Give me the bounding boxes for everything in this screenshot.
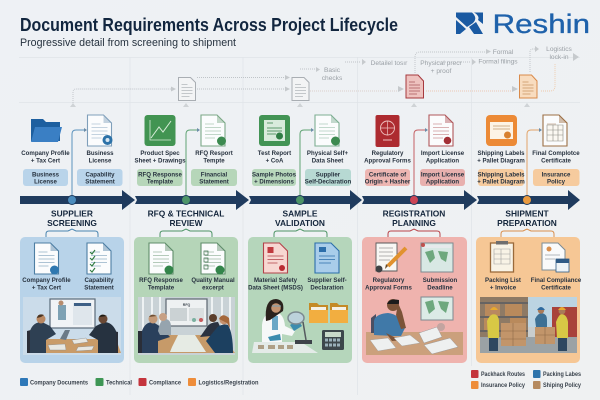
label: regulatory approval forms: Regulatory	[373, 277, 405, 284]
flow document 3	[292, 78, 309, 100]
flow label: physical proof: + proof	[431, 68, 452, 75]
icon: folder	[31, 119, 62, 142]
chip: insurance policy: Policy	[547, 178, 566, 186]
label: MSDS: Data Sheet (MSDS)	[248, 284, 303, 292]
scene: warehouse	[480, 297, 577, 353]
label: regulatory approval: Regulatory	[372, 150, 404, 157]
chip: RFQ response: RFQ Response	[138, 172, 182, 178]
panel: supplier screening	[20, 237, 124, 363]
chip: business license: License	[34, 178, 57, 186]
icon: quality manual	[201, 243, 225, 274]
label: import license: Application	[426, 158, 459, 164]
panel: registration planning	[362, 237, 467, 363]
stage 5 top documents	[477, 115, 580, 186]
icon: shipping certificate	[486, 115, 517, 146]
label: quality manual: excerpt	[202, 284, 224, 292]
heading: sample validation: SAMPLE	[283, 208, 318, 218]
label: business license: License	[89, 158, 112, 164]
chip: business license	[23, 169, 68, 186]
chip: RFQ response	[137, 169, 182, 186]
label: product spec: Product Spec	[140, 150, 180, 157]
chip: import license: Application	[426, 178, 459, 186]
heading: RFQ and technical review: RFQ & TECHNICAL	[148, 208, 224, 218]
flow label: formal filings: Formal filings	[478, 58, 518, 66]
heading: registration planning: REGISTRATION	[383, 208, 445, 218]
chip: capability statement: Statement	[85, 178, 115, 186]
chip: shipping labels: + Pallet Diagram	[477, 178, 525, 186]
flow label: basic checks: Basic	[324, 67, 341, 74]
label: product spec: Sheet + Drawings	[135, 158, 186, 164]
legend: document types: Packing Labes	[543, 371, 581, 378]
chip: certificate of origin	[365, 169, 411, 186]
flow label: formal: Formal	[493, 49, 514, 56]
legend: categories: Logistics/Registration	[198, 380, 259, 386]
stage 2 top documents	[135, 115, 237, 186]
label: regulatory approval forms: Approval Forms	[365, 284, 412, 292]
label: test report: Test Report	[258, 150, 291, 157]
flow label: detail: Detailel tosır	[371, 60, 408, 67]
chip: capability statement: Capability	[85, 172, 115, 178]
chip: import license	[420, 169, 465, 186]
label: business license: Business	[86, 150, 114, 157]
connector 4	[414, 130, 425, 196]
flow label: physical proof: Physical precr	[420, 60, 463, 67]
icon: passport	[376, 115, 400, 147]
label: RFQ response: Template	[148, 284, 175, 292]
icon: report document	[201, 115, 226, 146]
icon: approval forms and pen	[376, 243, 406, 272]
icon: capability checklist	[87, 243, 111, 274]
node 5	[522, 196, 532, 204]
chip: shipping labels	[477, 169, 525, 186]
label: company profile tax cert: + Tax Cert	[32, 284, 61, 292]
connector 1	[72, 130, 84, 196]
chip: import license: Import License	[421, 172, 465, 178]
chip: insurance policy	[533, 169, 580, 186]
legend: categories	[20, 378, 259, 386]
stage 3 top documents	[252, 115, 351, 186]
connector 3	[300, 130, 311, 196]
node 3	[296, 196, 304, 204]
panel: shipment preparation	[476, 237, 582, 363]
timeline arrow	[20, 128, 580, 210]
chip: sample photos: + Dimensions	[254, 178, 295, 186]
node 1	[68, 196, 76, 204]
heading: supplier screening: SUPPLIER	[51, 208, 93, 218]
legend: document types: Shiping Policy	[543, 382, 581, 389]
upper document flow	[70, 46, 579, 107]
heading: shipment preparation: SHIPMENT	[505, 208, 550, 218]
label: final compliance certificate: Final Compliance	[531, 277, 582, 284]
chip: financial statement	[191, 169, 237, 186]
chip: supplier declaration	[305, 169, 351, 186]
logo: Reshin: Reshin	[492, 9, 590, 39]
label: final compliance certificate: Certificate	[541, 284, 572, 292]
chip: supplier declaration: Self-Declaration	[305, 178, 351, 186]
icon: supplier declaration document	[315, 243, 339, 273]
heading: RFQ and technical review: REVIEW	[169, 218, 203, 228]
chip: sample photos: Sample Photos	[252, 172, 297, 178]
label: MSDS: Material Safety	[254, 277, 298, 284]
chip: financial statement: Financial	[201, 172, 228, 178]
logo: Reshin	[456, 9, 590, 39]
heading: sample validation: VALIDATION	[275, 218, 325, 228]
legend: categories: Technical	[106, 380, 132, 386]
chip: capability statement	[77, 169, 122, 186]
label: final compliance: Certificate	[541, 158, 572, 164]
chip: shipping labels: Shipping Labels	[477, 172, 525, 178]
label: supplier self-declaration: Supplier Self-	[307, 277, 347, 284]
panel: sample validation	[248, 237, 352, 363]
label: final compliance: Final Complotce	[532, 150, 580, 157]
stage 1 top documents	[21, 115, 122, 186]
flow document 5: orange	[520, 75, 537, 98]
icon: submission deadline map	[421, 243, 453, 272]
icon: company profile document	[34, 243, 59, 274]
heading: registration planning: PLANNING	[392, 218, 436, 228]
label: supplier self-declaration: Declaration	[310, 284, 344, 292]
label: packing list: Packing List	[485, 277, 521, 284]
node 2	[182, 196, 190, 204]
chip: certificate of origin: Certificate of	[369, 172, 407, 178]
legend: document types	[471, 370, 581, 389]
icon: self data sheet	[315, 115, 340, 146]
label: import license: Import License	[421, 150, 465, 157]
scene: meeting	[23, 297, 121, 355]
chip: supplier declaration: Supplier	[316, 172, 341, 178]
label: company profile: + Tax Cert	[31, 158, 60, 164]
icon: product spec chart	[144, 115, 176, 146]
scene: lab scientist	[252, 299, 348, 353]
label: physical self: Data Sheet	[312, 158, 343, 164]
label: submission deadline: Deadline	[427, 284, 453, 292]
scene: planner at desk	[366, 297, 463, 355]
label: RFQ response: RFQ Response	[139, 277, 183, 284]
label: regulatory approval: Approval Forms	[364, 158, 411, 164]
title: Document Requirements Across Project Lifecycle	[20, 14, 398, 35]
flow document 4: red	[406, 75, 424, 98]
chip: sample photos	[252, 169, 297, 186]
scene: review meeting: RFQ	[183, 303, 190, 307]
label: quality manual: Quality Manual	[191, 277, 235, 284]
chip: certificate of origin: Origin + Hasher	[365, 178, 411, 186]
label: packing list: + Invoice	[490, 284, 517, 292]
label: company profile tax cert: Company Profile	[22, 277, 71, 284]
icon: compliance certificate and calendar	[542, 243, 569, 272]
stage 4 top documents	[364, 115, 465, 186]
icon: import license document	[429, 115, 453, 146]
brackets	[46, 229, 554, 238]
label: capability statement: Capability	[84, 277, 114, 284]
flow label: basic checks: checks	[322, 75, 343, 82]
label: RFQ report: Tempte	[203, 158, 225, 164]
flow label: logistics: lock-in	[549, 54, 569, 61]
icon: test report	[259, 115, 290, 146]
legend: document types: Packhack Routes	[481, 371, 525, 378]
chip: business license: Business	[32, 172, 60, 178]
panel: RFQ review	[134, 237, 238, 363]
heading: shipment preparation: PREPARATION	[497, 218, 557, 228]
label: shipping labels: + Pallet Diagram	[477, 158, 525, 164]
node 4	[410, 196, 418, 204]
connector 2	[186, 130, 197, 196]
chip: insurance policy: Insurance	[542, 172, 571, 178]
label: RFQ report: RFQ Resport	[195, 150, 233, 157]
icon: MSDS document	[264, 243, 288, 273]
icon: business license document	[88, 115, 112, 146]
label: shipping labels: Shipping Labels	[477, 150, 525, 157]
flow label: logistics: Logistics	[546, 46, 573, 53]
icon: RFQ response document	[149, 243, 174, 274]
flow document 2	[178, 78, 196, 100]
icon: packing list clipboard	[490, 241, 514, 272]
legend: document types: Insurance Policy	[481, 382, 525, 389]
label: physical self: Physical Self+	[307, 150, 349, 157]
legend: categories: Compliance	[149, 380, 182, 386]
legend: categories: Company Documents	[30, 380, 89, 386]
subtitle: Progressive detail from screening to shipment	[20, 37, 237, 49]
chip: financial statement: Statement	[199, 178, 229, 186]
chip: RFQ response: Template	[147, 178, 174, 186]
label: capability statement: Statement	[84, 284, 114, 292]
label: submission deadline: Submission	[423, 277, 458, 284]
label: company profile: Company Profile	[21, 150, 70, 157]
heading: supplier screening: SCREENING	[47, 218, 97, 228]
connector 5	[527, 130, 539, 196]
icon: compliance document	[543, 115, 567, 146]
label: test report: + CoA	[266, 158, 284, 164]
